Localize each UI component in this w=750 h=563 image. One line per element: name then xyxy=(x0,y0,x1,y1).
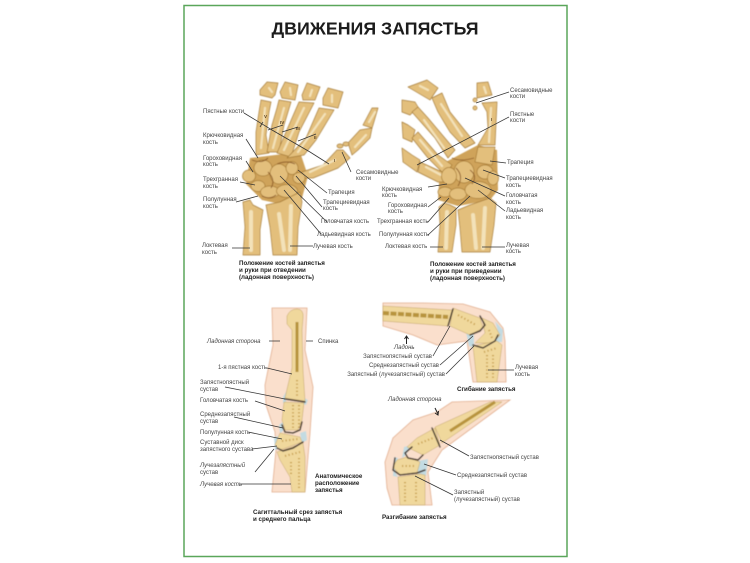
labels, sagittal: Запястнопястный xyxy=(200,379,249,386)
labels, adduction: Трехгранная кость xyxy=(377,219,429,225)
labels, abduction: кость xyxy=(203,204,218,210)
metacarpal numerals, abduction: III xyxy=(296,126,300,131)
labels, sagittal: Спинка xyxy=(318,339,339,345)
caption, abduction: (ладонная поверхность) xyxy=(239,274,314,281)
labels, abduction: кости xyxy=(356,176,371,182)
labels, adduction: кость xyxy=(506,215,521,221)
illustration: flexed wrist section xyxy=(383,303,506,382)
labels, adduction: кость xyxy=(388,209,403,215)
labels, adduction: Полулунная кость xyxy=(379,232,429,238)
labels, flexion: Запястный (лучезапястный) сустав xyxy=(347,371,445,378)
metacarpal numerals, abduction: IV xyxy=(280,120,284,125)
illustration: hand bones, abduction xyxy=(242,82,378,255)
labels, adduction: Гороховидная xyxy=(388,203,427,209)
panel: hand in abduction xyxy=(202,82,399,281)
caption, adduction: и руки при приведении xyxy=(430,268,502,275)
labels, adduction: Трапеция xyxy=(507,160,534,166)
panel: wrist flexion xyxy=(347,303,538,393)
note: anatomical position: запястья xyxy=(315,487,343,494)
labels, sagittal: Суставной диск xyxy=(200,439,244,446)
note: anatomical position: расположение xyxy=(315,480,360,487)
labels, adduction: Лучевая xyxy=(506,243,529,249)
labels, sagittal: Головчатая кость xyxy=(200,398,248,404)
labels, abduction: Лучевая кость xyxy=(313,244,353,250)
arrow: palm marker xyxy=(404,336,408,344)
labels, sagittal: 1-я пястная кость xyxy=(218,365,267,371)
labels, abduction: кость xyxy=(203,184,218,190)
metacarpal numerals, abduction xyxy=(264,114,335,163)
labels, adduction xyxy=(377,88,553,255)
caption, flexion: Сгибание запястья xyxy=(457,386,516,393)
labels, flexion: Лучевая xyxy=(515,365,538,371)
metacarpal numerals, abduction: V xyxy=(264,114,267,119)
labels, adduction: Головчатая xyxy=(506,193,537,199)
labels, abduction: Пястные кости xyxy=(203,109,244,115)
caption, abduction: и руки при отведении xyxy=(239,267,306,274)
arrow: palmar side marker xyxy=(435,408,438,415)
labels, sagittal: Лучезапястный xyxy=(199,462,246,469)
labels, abduction: кость xyxy=(203,162,218,168)
labels, flexion: Ладонь xyxy=(393,345,415,351)
labels, abduction: кость xyxy=(323,206,338,212)
labels, adduction: Крючковидная xyxy=(382,187,422,193)
metacarpal numeral, adduction: I xyxy=(491,117,492,122)
labels, abduction: Локтевая xyxy=(202,243,228,249)
labels, extension: Ладонная сторона xyxy=(387,397,442,403)
labels, sagittal xyxy=(199,339,339,488)
caption, adduction: (ладонная поверхность) xyxy=(430,275,505,282)
labels, sagittal: запястного сустава xyxy=(200,447,254,453)
labels, adduction: кость xyxy=(506,183,521,189)
poster frame xyxy=(184,6,567,556)
panel: hand in adduction xyxy=(377,80,553,282)
caption, sagittal: Сагиттальный срез запястья xyxy=(253,509,343,516)
labels, adduction: кость xyxy=(382,193,397,199)
labels, flexion: кость xyxy=(515,372,530,378)
labels, extension: Запястнопястный сустав xyxy=(470,454,539,461)
labels, abduction: Сесамовидные xyxy=(356,170,399,176)
labels, adduction: Сесамовидные xyxy=(510,88,553,94)
illustration: hand bones, adduction xyxy=(402,80,498,252)
labels, abduction: Трапециевидная xyxy=(323,200,370,206)
metacarpal numerals, abduction: I xyxy=(334,158,335,163)
labels, adduction: кости xyxy=(510,94,525,100)
note: anatomical position: Анатомическое xyxy=(315,473,363,480)
labels, abduction: Крючковидная xyxy=(203,133,243,139)
labels, adduction: Пястные xyxy=(510,112,535,118)
labels, abduction: Головчатая кость xyxy=(321,219,369,225)
labels, abduction: Трапеция xyxy=(328,190,355,196)
panel: wrist extension xyxy=(382,397,539,521)
caption, abduction: Положение костей запястья xyxy=(239,260,325,267)
labels, abduction xyxy=(202,109,399,256)
labels, extension: (лучезапястный) сустав xyxy=(454,496,520,503)
labels, abduction: кость xyxy=(202,250,217,256)
callout lines, flexion xyxy=(433,326,514,374)
panel: sagittal section xyxy=(199,308,363,523)
caption, sagittal: и среднего пальца xyxy=(253,516,311,523)
labels, sagittal: Ладонная сторона xyxy=(206,339,261,345)
labels, adduction: кость xyxy=(506,249,521,255)
note: anatomical position xyxy=(315,473,363,494)
title: ДВИЖЕНИЯ ЗАПЯСТЬЯ xyxy=(271,18,479,38)
labels, abduction: Ладьевидная кость xyxy=(317,232,371,238)
labels, sagittal: сустав xyxy=(200,470,218,476)
illustration: sagittal section of wrist and middle finger xyxy=(265,308,313,492)
callout lines, sagittal xyxy=(225,341,313,484)
labels, sagittal: сустав xyxy=(200,419,218,425)
caption, sagittal xyxy=(253,509,343,523)
labels, abduction: Полулунная xyxy=(203,197,237,203)
caption, adduction xyxy=(430,261,516,282)
labels, sagittal: сустав xyxy=(200,387,218,393)
caption, abduction xyxy=(239,260,325,281)
callout lines, adduction xyxy=(417,92,509,247)
labels, abduction: Гороховидная xyxy=(203,156,242,162)
labels, flexion: Среднезапястный сустав xyxy=(369,362,439,369)
labels, abduction: Трехгранная xyxy=(203,177,238,183)
callout lines, extension xyxy=(415,440,469,495)
labels, adduction: Трапециевидная xyxy=(506,176,553,182)
labels, flexion xyxy=(347,345,538,378)
caption, extension: Разгибание запястья xyxy=(382,514,447,521)
labels, abduction: кость xyxy=(203,140,218,146)
metacarpal numerals, abduction: II xyxy=(314,135,317,140)
labels, extension: Среднезапястный сустав xyxy=(457,472,527,479)
labels, adduction: кости xyxy=(510,118,525,124)
caption, adduction: Положение костей запястья xyxy=(430,261,516,268)
labels, flexion: Запястнопястный сустав xyxy=(363,353,432,360)
illustration: extended wrist section xyxy=(385,400,510,505)
labels, extension xyxy=(387,397,539,503)
labels, sagittal: Лучевая кость xyxy=(199,482,242,488)
labels, sagittal: Полулунная кость xyxy=(200,430,250,436)
labels, sagittal: Среднезапястный xyxy=(200,411,250,418)
labels, adduction: Локтевая кость xyxy=(385,244,427,250)
labels, adduction: кость xyxy=(506,200,521,206)
labels, adduction: Ладьевидная xyxy=(506,208,543,214)
labels, extension: Запястный xyxy=(454,489,484,496)
callout lines, abduction xyxy=(232,113,351,248)
